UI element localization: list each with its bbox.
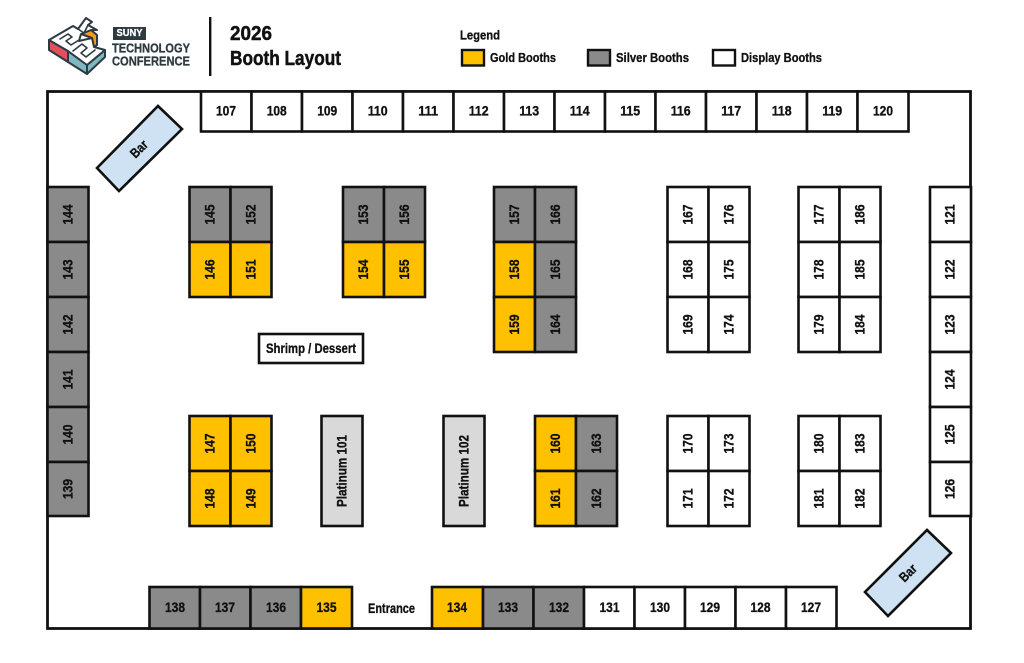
- top row booths 107-120: 120: [873, 104, 893, 118]
- legend: silver: Silver Booths: [616, 50, 689, 65]
- booth block 160-163: 160: [548, 434, 563, 454]
- booth block 160-163: 161: [548, 488, 563, 508]
- booth block 177-179, 184-186: 177: [812, 204, 826, 224]
- booth block 160-163: 163: [589, 433, 604, 454]
- right column booths 121-126: 123: [942, 314, 958, 334]
- platinum 101: [322, 416, 362, 526]
- booth block 180-183: 183: [852, 433, 868, 454]
- logo: SUNY Technology Conference: [49, 18, 191, 74]
- booth block 157-159, 164-166: 166: [548, 204, 563, 224]
- right column booths 121-126: 121: [942, 204, 958, 224]
- bar: top left: [97, 106, 182, 191]
- left column booths 139-144: 144: [60, 204, 76, 224]
- bottom row booths 127-134: [432, 587, 836, 628]
- legend: silver: [588, 50, 689, 66]
- left column booths 139-144: 140: [60, 424, 76, 444]
- title: [230, 23, 341, 70]
- top row booths 107-120: 113: [519, 104, 540, 118]
- legend: display: [713, 50, 822, 66]
- top row booths 107-120: 112: [469, 104, 489, 118]
- top row booths 107-120: 114: [570, 104, 590, 118]
- platinum 102: [444, 416, 484, 526]
- legend: [460, 28, 822, 66]
- right column booths 121-126: 126: [942, 479, 958, 499]
- left column booths 139-144: 143: [60, 259, 76, 280]
- shrimp / dessert station: [259, 334, 363, 363]
- bar: bottom right: [865, 530, 951, 616]
- badge: SUNY: SUNY: [116, 28, 143, 39]
- booth block 147-150: 150: [244, 434, 258, 454]
- bottom row booths 127-134: 129: [700, 600, 720, 615]
- booth block 145-146, 151-152: 151: [244, 259, 258, 280]
- booth block 145-146, 151-152: 146: [202, 259, 218, 280]
- icon: isometric STC block: [49, 18, 105, 74]
- booth block 160-163: 162: [589, 488, 604, 508]
- logo text: Conference: CONFERENCE: [112, 54, 190, 68]
- booth block 157-159, 164-166: [494, 187, 576, 352]
- booth block 147-150: [190, 416, 272, 526]
- booth block 147-150: 148: [202, 488, 218, 508]
- booth block 177-179, 184-186: 179: [812, 314, 826, 334]
- booth block 170-173: 171: [680, 488, 696, 508]
- entrance label: Entrance: [368, 601, 415, 616]
- top row booths 107-120: [201, 92, 908, 132]
- booth block 147-150: 147: [202, 434, 218, 454]
- booth block 170-173: 173: [722, 433, 736, 454]
- right column booths 121-126: [930, 187, 971, 516]
- booth block 147-150: 149: [244, 488, 258, 508]
- legend: gold: [462, 50, 556, 66]
- booth block 170-173: 172: [722, 488, 736, 508]
- bottom row booths 135-138: 135: [316, 600, 337, 615]
- header divider: [209, 17, 211, 76]
- shrimp / dessert station: Shrimp / Dessert: [266, 341, 356, 356]
- bottom row booths 135-138: 138: [165, 600, 185, 615]
- booth block 153-156: 156: [397, 204, 412, 224]
- bar: bottom right: Bar: [896, 561, 920, 585]
- booth block 153-156: [343, 187, 425, 297]
- platinum 102: Platinum 102: [456, 435, 472, 507]
- bottom row booths 127-134: 132: [549, 600, 569, 615]
- right column booths 121-126: 122: [942, 260, 958, 280]
- right column booths 121-126: 125: [942, 424, 958, 444]
- booth block 157-159, 164-166: 165: [548, 259, 563, 280]
- booth block 157-159, 164-166: 164: [548, 314, 563, 334]
- booth block 160-163: [535, 416, 617, 526]
- bottom row booths 135-138: 137: [215, 600, 235, 615]
- booth block 167-169, 174-176: 175: [722, 259, 736, 280]
- booth block 167-169, 174-176: 167: [680, 204, 696, 224]
- booth block 170-173: 170: [680, 434, 696, 454]
- left column booths 139-144: 142: [60, 314, 76, 334]
- booth block 153-156: 155: [397, 259, 412, 280]
- bottom row booths 127-134: 130: [650, 600, 670, 615]
- platinum 101: Platinum 101: [334, 435, 350, 507]
- bottom row booths 127-134: 128: [750, 600, 771, 615]
- booth block 145-146, 151-152: 152: [244, 204, 258, 224]
- legend title: Legend: [460, 28, 500, 42]
- booth block 153-156: 153: [356, 204, 371, 224]
- booth block 180-183: 181: [812, 488, 826, 508]
- top row booths 107-120: 115: [620, 104, 641, 118]
- top row booths 107-120: 110: [368, 104, 388, 118]
- bottom row booths 127-134: 134: [447, 600, 467, 615]
- title: Booth Layout: [230, 48, 341, 70]
- bottom row booths 127-134: 131: [600, 600, 620, 615]
- booth block 170-173: [668, 416, 750, 526]
- booth block 167-169, 174-176: [668, 187, 750, 352]
- top row booths 107-120: 118: [772, 104, 792, 118]
- booth block 157-159, 164-166: 158: [507, 259, 522, 280]
- booth block 145-146, 151-152: [190, 187, 272, 297]
- booth block 167-169, 174-176: 168: [680, 259, 696, 280]
- top row booths 107-120: 109: [317, 104, 337, 118]
- left column booths 139-144: [48, 187, 88, 516]
- bottom row booths 127-134: 127: [801, 600, 821, 615]
- booth block 153-156: 154: [356, 259, 371, 280]
- logo text: Technology: TECHNOLOGY: [112, 42, 191, 56]
- bottom row booths 135-138: [150, 587, 352, 628]
- booth block 180-183: 180: [812, 434, 826, 454]
- booth block 157-159, 164-166: 157: [507, 204, 522, 224]
- top row booths 107-120: 117: [721, 104, 741, 118]
- top row booths 107-120: 111: [418, 104, 439, 118]
- booth block 180-183: 182: [852, 488, 868, 508]
- right column booths 121-126: 124: [942, 369, 958, 390]
- booth block 177-179, 184-186: 185: [852, 259, 868, 280]
- legend: gold: Gold Booths: [490, 50, 556, 65]
- top row booths 107-120: 116: [671, 104, 691, 118]
- bottom row booths 135-138: 136: [266, 600, 286, 615]
- booth block 157-159, 164-166: 159: [507, 314, 522, 334]
- booth block 177-179, 184-186: 186: [852, 204, 868, 224]
- booth block 167-169, 174-176: 176: [722, 204, 736, 224]
- bar: top left: Bar: [127, 137, 151, 161]
- title: 2026: [230, 23, 272, 45]
- booth block 177-179, 184-186: 184: [852, 314, 868, 334]
- booth block 167-169, 174-176: 174: [722, 314, 736, 334]
- booth block 180-183: [798, 416, 880, 526]
- booth block 177-179, 184-186: [798, 187, 880, 352]
- booth block 177-179, 184-186: 178: [812, 259, 826, 280]
- top row booths 107-120: 108: [267, 104, 287, 118]
- left column booths 139-144: 139: [60, 479, 76, 499]
- bottom row booths 127-134: 133: [498, 600, 518, 615]
- booth block 167-169, 174-176: 169: [680, 314, 696, 334]
- top row booths 107-120: 107: [216, 104, 236, 118]
- legend: display: Display Booths: [741, 50, 822, 65]
- left column booths 139-144: 141: [60, 369, 76, 390]
- booth block 145-146, 151-152: 145: [202, 204, 218, 224]
- top row booths 107-120: 119: [822, 104, 842, 118]
- floor outline: [48, 92, 970, 628]
